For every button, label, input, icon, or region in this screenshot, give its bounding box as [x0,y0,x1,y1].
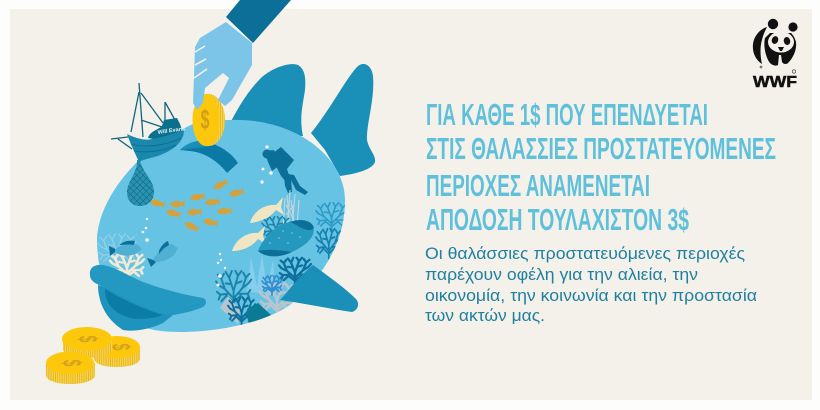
net mesh [127,160,154,206]
body text: Οι θαλάσσιες προστατευόμενες περιοχές [425,245,745,263]
pale coral behind reef [98,234,136,267]
heading: ΠΕΡΙΟΧΕΣ ΑΝΑΜΕΝΕΤΑΙ [426,169,650,203]
corals and sea life clipped to the body [98,203,347,326]
right coin: $ [105,343,135,351]
body text: παρέχουν οφέλη για την αλιεία, την [425,266,698,284]
stack of gold coins [46,327,140,384]
logo text: WWF [753,74,797,91]
pale kelp bottom [247,254,276,294]
hull [127,130,184,162]
bubbles [142,145,273,286]
body text [425,245,757,325]
left coin: $ [56,359,86,367]
coral: bright blue [262,276,282,295]
coral: dark right [279,258,311,285]
rigging [111,83,175,149]
pectoral fin [280,265,358,312]
WWF logo [753,19,798,91]
panda [753,19,798,68]
illustration: piggy-bank fish [90,64,375,332]
fishing boat with net [111,83,185,206]
coin in the slot: $ [201,104,210,135]
mouth interior [105,289,163,319]
dorsal fin [224,64,305,136]
kelp above rock [283,190,299,230]
coral: bottom dark [228,298,255,326]
fish body [97,120,345,332]
coral: right upper [316,203,347,231]
white reef coral [110,253,144,281]
sleeve [226,0,291,43]
registered mark [792,70,796,73]
heading [426,98,776,237]
gloved hand [193,22,252,110]
lower jaw [98,285,173,331]
small coral on rock [262,217,290,240]
school of golden fish [149,178,245,233]
blue reef fish right [147,241,178,267]
diver [262,147,308,195]
seabed rock with reef [258,220,314,256]
seabed rock [247,303,271,325]
grey coral left [220,296,240,324]
coin slot [180,141,238,173]
coral: right lower [316,229,342,258]
body text: των ακτών μας. [425,307,545,325]
blue reef fish left [109,241,142,256]
tuna 1 [250,197,284,223]
cabin [148,118,183,142]
tuna 2 [232,226,266,251]
upper lip [90,265,206,315]
tail fin [311,64,375,176]
net [127,160,154,206]
body text: οικονομία, την κοινωνία και την προστασία [425,287,757,305]
top coin: $ [72,335,102,343]
grey coral [260,283,294,316]
coin in the slot [192,94,225,146]
coral: bottom left [216,271,251,308]
hull planks [131,138,181,152]
boat name: Will Evans [157,126,185,136]
